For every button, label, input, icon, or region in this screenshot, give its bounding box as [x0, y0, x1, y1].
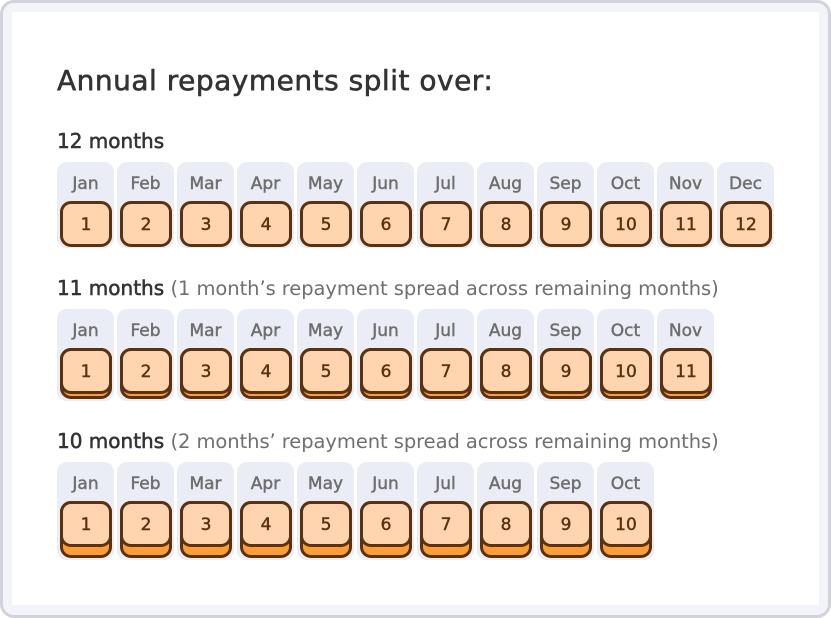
month: May: [297, 309, 354, 401]
month: Mar: 3: [201, 215, 211, 235]
month: Jan: [57, 462, 114, 560]
month: May: [297, 162, 354, 248]
month: Oct: 10: [615, 362, 637, 382]
month: Aug: [477, 309, 534, 401]
month: Mar: Mar: [189, 174, 222, 194]
month: Jan: Jan: [72, 474, 99, 494]
month: Feb: Feb: [130, 474, 161, 494]
month: Aug: Aug: [489, 474, 522, 494]
month: Apr: Apr: [251, 174, 280, 194]
month: May: 5: [321, 515, 331, 535]
month: Jul: [417, 309, 474, 401]
month: Dec: [717, 162, 774, 248]
month: Feb: 2: [141, 362, 151, 382]
heading: 10 months: 10 months (2 months’ repayment spread across remaining months): [57, 429, 719, 453]
month: Nov: Nov: [669, 321, 702, 341]
month: Jul: Jul: [435, 321, 456, 341]
month: Oct: Oct: [611, 174, 640, 194]
title: Annual repayments split over:: [57, 64, 493, 97]
month: Jun: Jun: [372, 474, 399, 494]
month: May: 5: [321, 362, 331, 382]
month: Aug: Aug: [489, 174, 522, 194]
month: Feb: [117, 462, 174, 560]
heading: 11 months: 11 months (1 month’s repayment spread across remaining months): [57, 276, 719, 300]
month: Sep: 9: [561, 215, 571, 235]
month: Aug: 8: [501, 515, 511, 535]
month: Sep: [537, 162, 594, 248]
month: Sep: Sep: [549, 474, 582, 494]
month: Oct: Oct: [611, 321, 640, 341]
month: Sep: 9: [561, 362, 571, 382]
month: May: May: [308, 321, 343, 341]
month: Jun: Jun: [372, 321, 399, 341]
month: Feb: [117, 162, 174, 248]
month: Aug: Aug: [489, 321, 522, 341]
month: Jan: 1: [81, 362, 91, 382]
month: Jun: [357, 162, 414, 248]
month: May: 5: [321, 215, 331, 235]
month: May: [297, 462, 354, 560]
month: Oct: 10: [615, 515, 637, 535]
month: Jan: [57, 162, 114, 248]
month: Aug: 8: [501, 362, 511, 382]
month: Feb: Feb: [130, 174, 161, 194]
month: Apr: 4: [261, 362, 271, 382]
month: Sep: Sep: [549, 321, 582, 341]
month: Jul: [417, 462, 474, 560]
month: Aug: 8: [501, 215, 511, 235]
month: Nov: 11: [675, 215, 697, 235]
month: Jan: [57, 309, 114, 401]
month: Apr: [237, 462, 294, 560]
month: Apr: 4: [261, 215, 271, 235]
month: Aug: [477, 162, 534, 248]
month: Jan: Jan: [72, 321, 99, 341]
month: Nov: 11: [675, 362, 697, 382]
month: Oct: [597, 309, 654, 401]
month: May: May: [308, 474, 343, 494]
month: Jul: Jul: [435, 474, 456, 494]
month: Jul: 7: [441, 515, 451, 535]
month: Jul: Jul: [435, 174, 456, 194]
month: Mar: [177, 462, 234, 560]
month: Mar: [177, 162, 234, 248]
month: Jan: Jan: [72, 174, 99, 194]
month: Feb: 2: [141, 215, 151, 235]
month: Oct: 10: [615, 215, 637, 235]
month: Feb: 2: [141, 515, 151, 535]
month: Apr: 4: [261, 515, 271, 535]
month: Sep: Sep: [549, 174, 582, 194]
month: Nov: [657, 309, 714, 401]
month: Mar: Mar: [189, 321, 222, 341]
month: Mar: Mar: [189, 474, 222, 494]
row: 11 months: [57, 309, 714, 401]
month: Oct: [597, 462, 654, 560]
month: Sep: [537, 462, 594, 560]
month: Mar: 3: [201, 515, 211, 535]
month: Jul: [417, 162, 474, 248]
month: May: May: [308, 174, 343, 194]
month: Jan: 1: [81, 515, 91, 535]
row: 10 months: [57, 462, 654, 560]
month: Apr: [237, 309, 294, 401]
row: 12 months: [57, 162, 774, 248]
month: Mar: [177, 309, 234, 401]
month: Sep: 9: [561, 515, 571, 535]
month: Jun: 6: [381, 515, 391, 535]
month: Jul: 7: [441, 215, 451, 235]
month: Jun: [357, 309, 414, 401]
heading: 12 months: 12 months: [57, 129, 164, 153]
month: Dec: 12: [735, 215, 757, 235]
month: Oct: [597, 162, 654, 248]
month: Jun: Jun: [372, 174, 399, 194]
month: Jun: 6: [381, 362, 391, 382]
month: Jun: 6: [381, 215, 391, 235]
month: Jan: 1: [81, 215, 91, 235]
month: Aug: [477, 462, 534, 560]
month: Dec: Dec: [729, 174, 762, 194]
month: Feb: Feb: [130, 321, 161, 341]
month: Apr: Apr: [251, 321, 280, 341]
month: Feb: [117, 309, 174, 401]
month: Mar: 3: [201, 362, 211, 382]
month: Apr: Apr: [251, 474, 280, 494]
month: Nov: [657, 162, 714, 248]
month: Jun: [357, 462, 414, 560]
month: Sep: [537, 309, 594, 401]
month: Nov: Nov: [669, 174, 702, 194]
month: Apr: [237, 162, 294, 248]
month: Jul: 7: [441, 362, 451, 382]
month: Oct: Oct: [611, 474, 640, 494]
